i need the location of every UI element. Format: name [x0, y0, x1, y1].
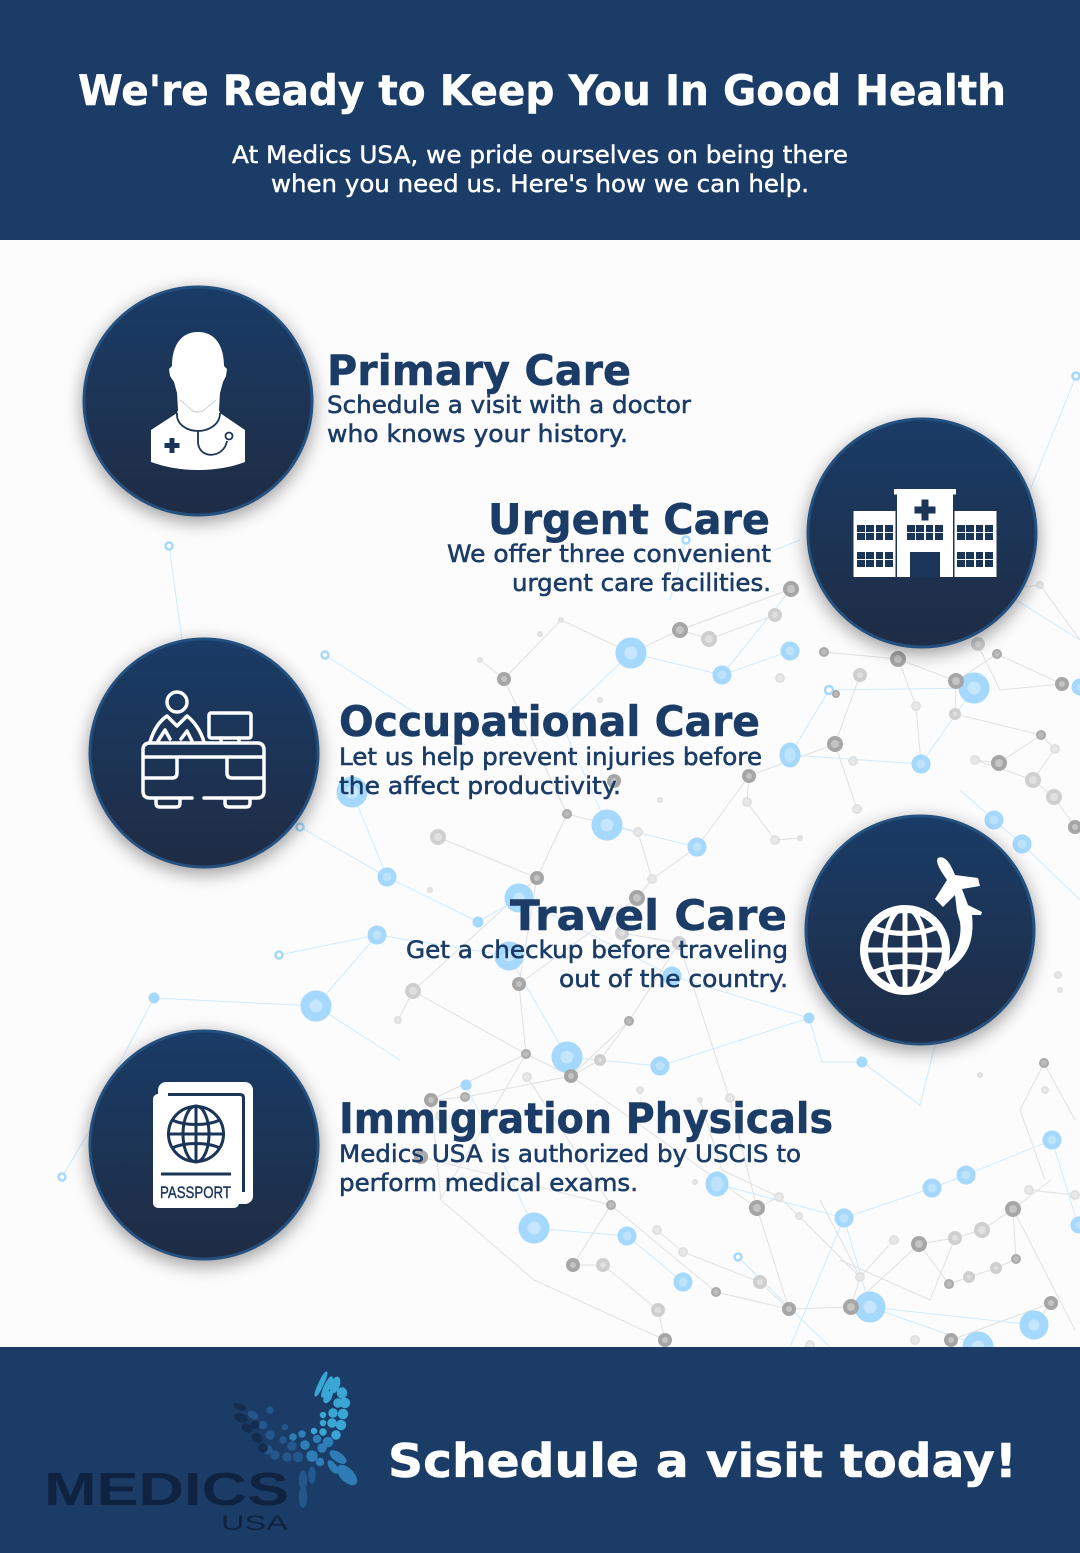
- text: occupational care: the affect productivity.: [339, 772, 621, 800]
- title: We're Ready to Keep You In Good Health: [78, 66, 1006, 115]
- wordmark: [44, 1463, 289, 1535]
- text: travel care: [406, 936, 788, 993]
- icon: doctor: [151, 332, 245, 470]
- text: immigration physicals: perform medical exams.: [339, 1169, 638, 1197]
- background: molecular network: [58, 372, 1080, 1358]
- panel: travel care: [406, 816, 1036, 1051]
- heading: urgent care: Urgent Care: [488, 495, 770, 544]
- panel: primary care: [82, 287, 691, 522]
- heading: occupational care: Occupational Care: [339, 697, 760, 746]
- text: primary care: [327, 391, 691, 448]
- icon: hospital: [854, 489, 996, 577]
- wordmark: USA: [221, 1512, 288, 1535]
- footer band: [0, 1347, 1080, 1553]
- call to action: Schedule a visit today!: [388, 1434, 1017, 1488]
- text: occupational care: [339, 743, 762, 800]
- icon: person at desk: [143, 692, 264, 807]
- intro text: when you need us. Here's how we can help.: [271, 170, 809, 198]
- text: primary care: who knows your history.: [327, 420, 628, 448]
- intro text: [232, 141, 848, 198]
- panel: immigration physicals: [88, 1031, 833, 1266]
- panel: urgent care: [447, 419, 1038, 654]
- text: urgent care: urgent care facilities.: [512, 569, 771, 597]
- text: primary care: Schedule a visit with a doctor: [327, 391, 691, 419]
- text: travel care: Get a checkup before traveling: [406, 936, 788, 964]
- text: occupational care: Let us help prevent injuries before: [339, 743, 762, 771]
- icon: globe and plane: [863, 857, 982, 992]
- wordmark: MEDICS: [44, 1463, 289, 1515]
- text: immigration physicals: Medics USA is authorized by USCIS to: [339, 1140, 801, 1168]
- logo: Medics USA: [44, 1371, 360, 1535]
- icon: passport: PASSPORT: [160, 1183, 231, 1202]
- heading: immigration physicals: Immigration Physicals: [339, 1094, 833, 1143]
- text: urgent care: [447, 540, 771, 597]
- text: travel care: out of the country.: [559, 965, 788, 993]
- icon: wing mark: [234, 1371, 360, 1507]
- text: immigration physicals: [339, 1140, 801, 1197]
- panel: occupational care: [88, 639, 762, 874]
- header band: [0, 0, 1080, 240]
- intro text: At Medics USA, we pride ourselves on being there: [232, 141, 848, 169]
- heading: travel care: Travel Care: [510, 891, 787, 940]
- icon: passport: [153, 1082, 253, 1208]
- text: urgent care: We offer three convenient: [447, 540, 771, 568]
- heading: primary care: Primary Care: [327, 346, 631, 395]
